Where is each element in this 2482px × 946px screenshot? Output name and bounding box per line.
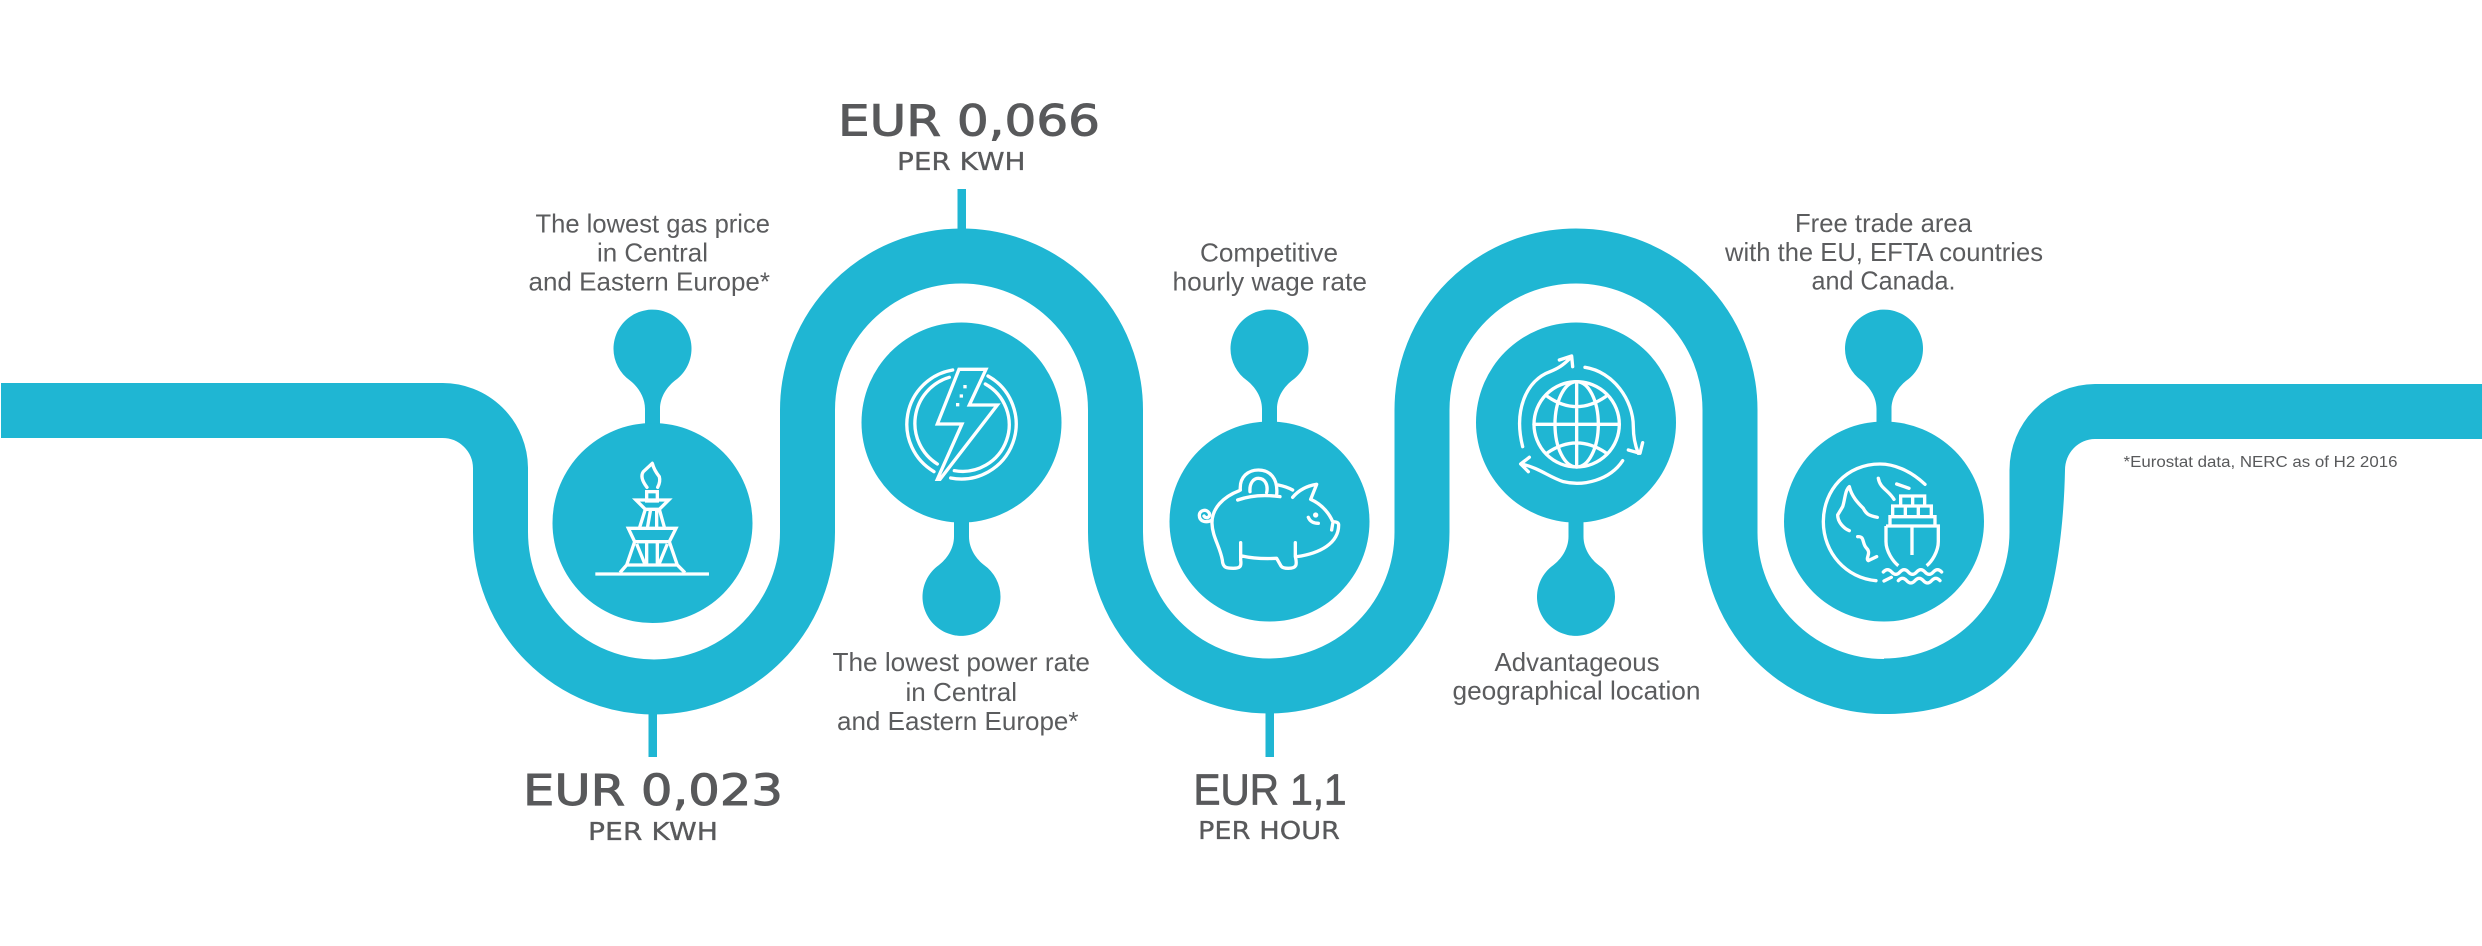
wage text: Competitive (1200, 238, 1338, 268)
gas price value: EUR 0,023 (523, 767, 783, 816)
step 4: geography (1452, 322, 1700, 706)
stem (648, 710, 657, 757)
power text: in Central (906, 677, 1017, 707)
trade text (1724, 208, 2043, 296)
geography circle (1476, 322, 1676, 522)
stem (958, 189, 966, 231)
power price unit: PER KWH (897, 147, 1026, 176)
step 1: gas price (523, 208, 783, 846)
winding ribbon path (1, 256, 2482, 714)
trade text: with the EU, EFTA countries (1724, 237, 2043, 267)
icon: gas platform with flame (595, 463, 709, 574)
step 5: free trade (1724, 208, 2043, 622)
icon: piggy bank (1199, 470, 1339, 568)
step 3: hourly wage (1170, 238, 1370, 845)
gas price unit: PER KWH (588, 817, 718, 846)
wage value: EUR 1,1 (1194, 766, 1346, 814)
icon: globe with circular arrows (1520, 356, 1643, 483)
step 2: power rate (832, 98, 1100, 736)
trade text: Free trade area (1795, 208, 1973, 238)
trade connector blob (1845, 310, 1923, 425)
power price value: EUR 0,066 (838, 98, 1100, 146)
gas text: and Eastern Europe* (528, 266, 770, 296)
gas circle (552, 423, 752, 623)
wage text: hourly wage rate (1172, 266, 1367, 296)
gas text: The lowest gas price (536, 208, 770, 238)
power circle (862, 322, 1062, 522)
power text: The lowest power rate (832, 647, 1090, 677)
footnote: *Eurostat data, NERC as of H2 2016 (2124, 454, 2398, 471)
power connector blob (923, 520, 1001, 636)
trade text: and Canada. (1812, 266, 1956, 296)
geography text (1452, 647, 1700, 706)
wage circle (1170, 422, 1370, 622)
wage text (1172, 238, 1367, 296)
gas connector blob (613, 310, 691, 425)
gas text: in Central (597, 238, 708, 268)
trade circle (1784, 422, 1984, 622)
geography text: geographical location (1452, 676, 1700, 706)
power text (832, 647, 1090, 736)
icon: globe with cargo ship (1823, 464, 1942, 583)
gas text (528, 208, 770, 296)
power text: and Eastern Europe* (837, 706, 1078, 736)
geography connector blob (1537, 520, 1615, 636)
wage connector blob (1230, 310, 1308, 425)
stem (1266, 710, 1274, 757)
wage unit: PER HOUR (1198, 816, 1340, 845)
geography text: Advantageous (1494, 647, 1660, 677)
icon: lightning bolt in ring (907, 369, 1016, 479)
